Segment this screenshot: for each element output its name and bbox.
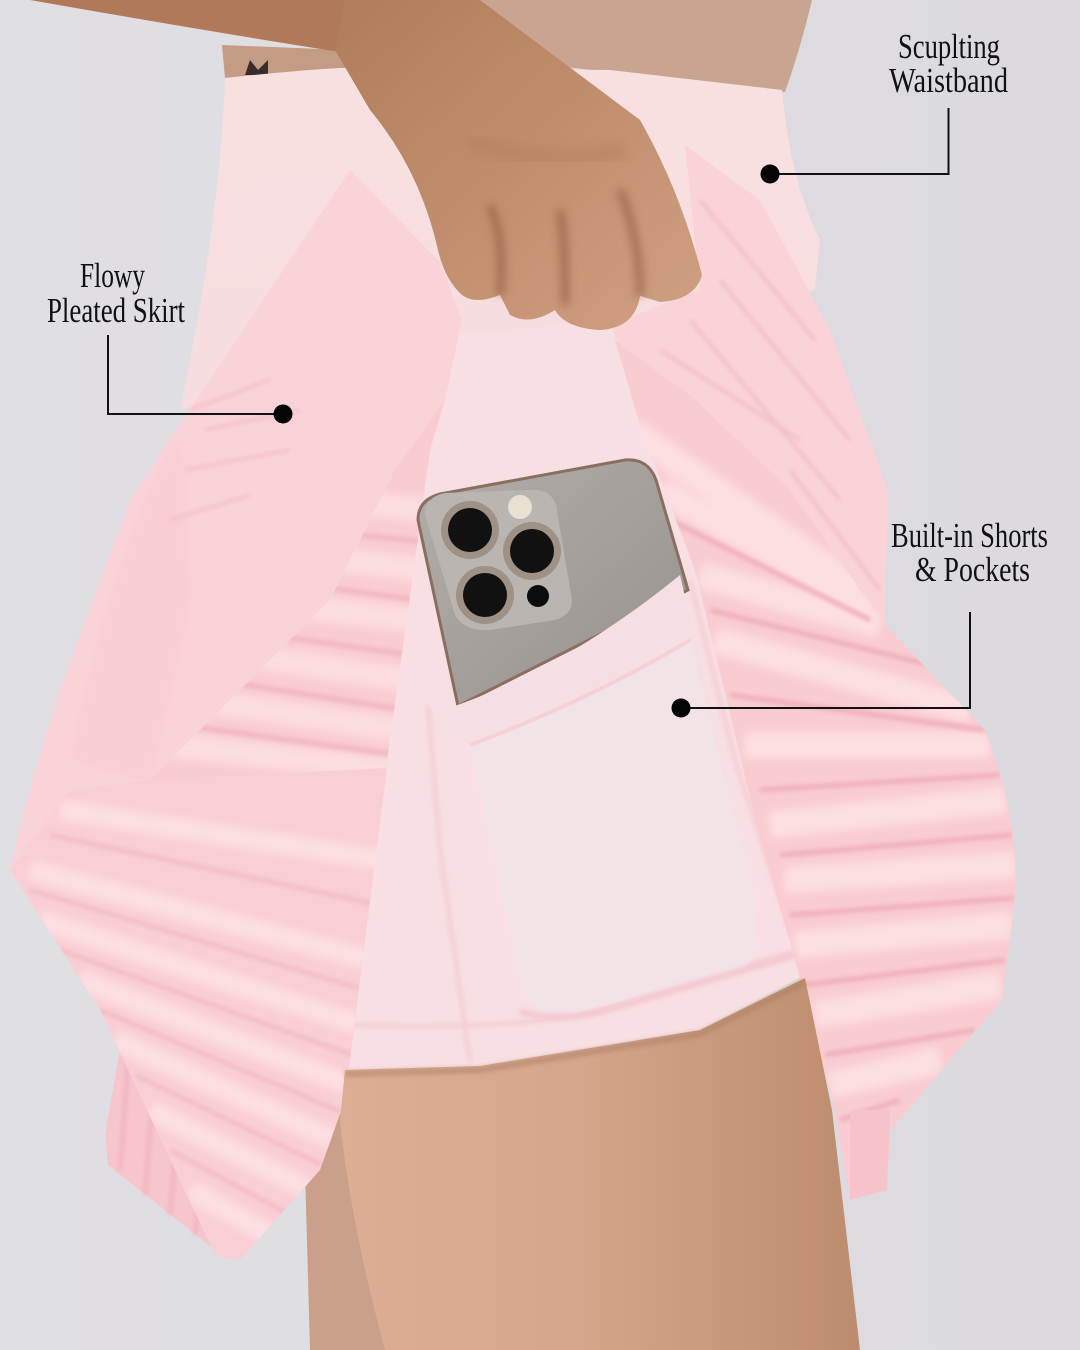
waist skin [455, 0, 812, 92]
sculpting waistband [180, 68, 820, 410]
skirt right lower pleats [615, 340, 1016, 1200]
skirt right upper flap [610, 145, 888, 620]
label text: & Pockets [915, 550, 1030, 589]
hand [335, 0, 702, 330]
callout: Sculpting Waistband [760, 27, 1008, 184]
skirt left upper flap [10, 170, 462, 870]
hem shadow on thigh [345, 982, 805, 1074]
label text [889, 27, 1008, 100]
tattoo [245, 60, 268, 75]
torso skin above waistband [222, 45, 345, 78]
lens top [441, 501, 499, 559]
back skirt pleats [105, 1020, 300, 1258]
pocket hem [520, 955, 795, 1017]
front thigh [340, 978, 860, 1350]
flash [508, 495, 532, 519]
phone [418, 460, 688, 706]
leader line [681, 612, 970, 708]
callout: Flowy Pleated Skirt [47, 256, 292, 424]
label text [891, 516, 1048, 589]
label text [47, 256, 185, 330]
skirt left inner pleats [150, 400, 445, 780]
back thigh [305, 1110, 390, 1350]
pocket [428, 575, 795, 1017]
label text: Pleated Skirt [47, 291, 185, 330]
label text: Waistband [889, 61, 1008, 100]
knuckle shading [470, 140, 625, 158]
lens bottom [456, 566, 514, 624]
camera bump [425, 490, 572, 630]
lidar sensor [527, 585, 549, 607]
lens right [503, 522, 561, 580]
marker dot [672, 698, 690, 718]
marker dot [760, 164, 780, 184]
built-in shorts [345, 320, 805, 1070]
label text: Scuplting [898, 27, 1000, 66]
leader line [770, 108, 948, 174]
callout: Built-in Shorts and Pockets [672, 516, 1048, 718]
marker dot [274, 404, 292, 424]
finger shading [490, 190, 640, 305]
skirt left lower flap [10, 768, 387, 1260]
phone body [418, 460, 688, 706]
arm [30, 0, 345, 52]
label text: Flowy [80, 256, 145, 295]
leader line [108, 335, 283, 414]
shorts stitching [350, 580, 800, 1062]
